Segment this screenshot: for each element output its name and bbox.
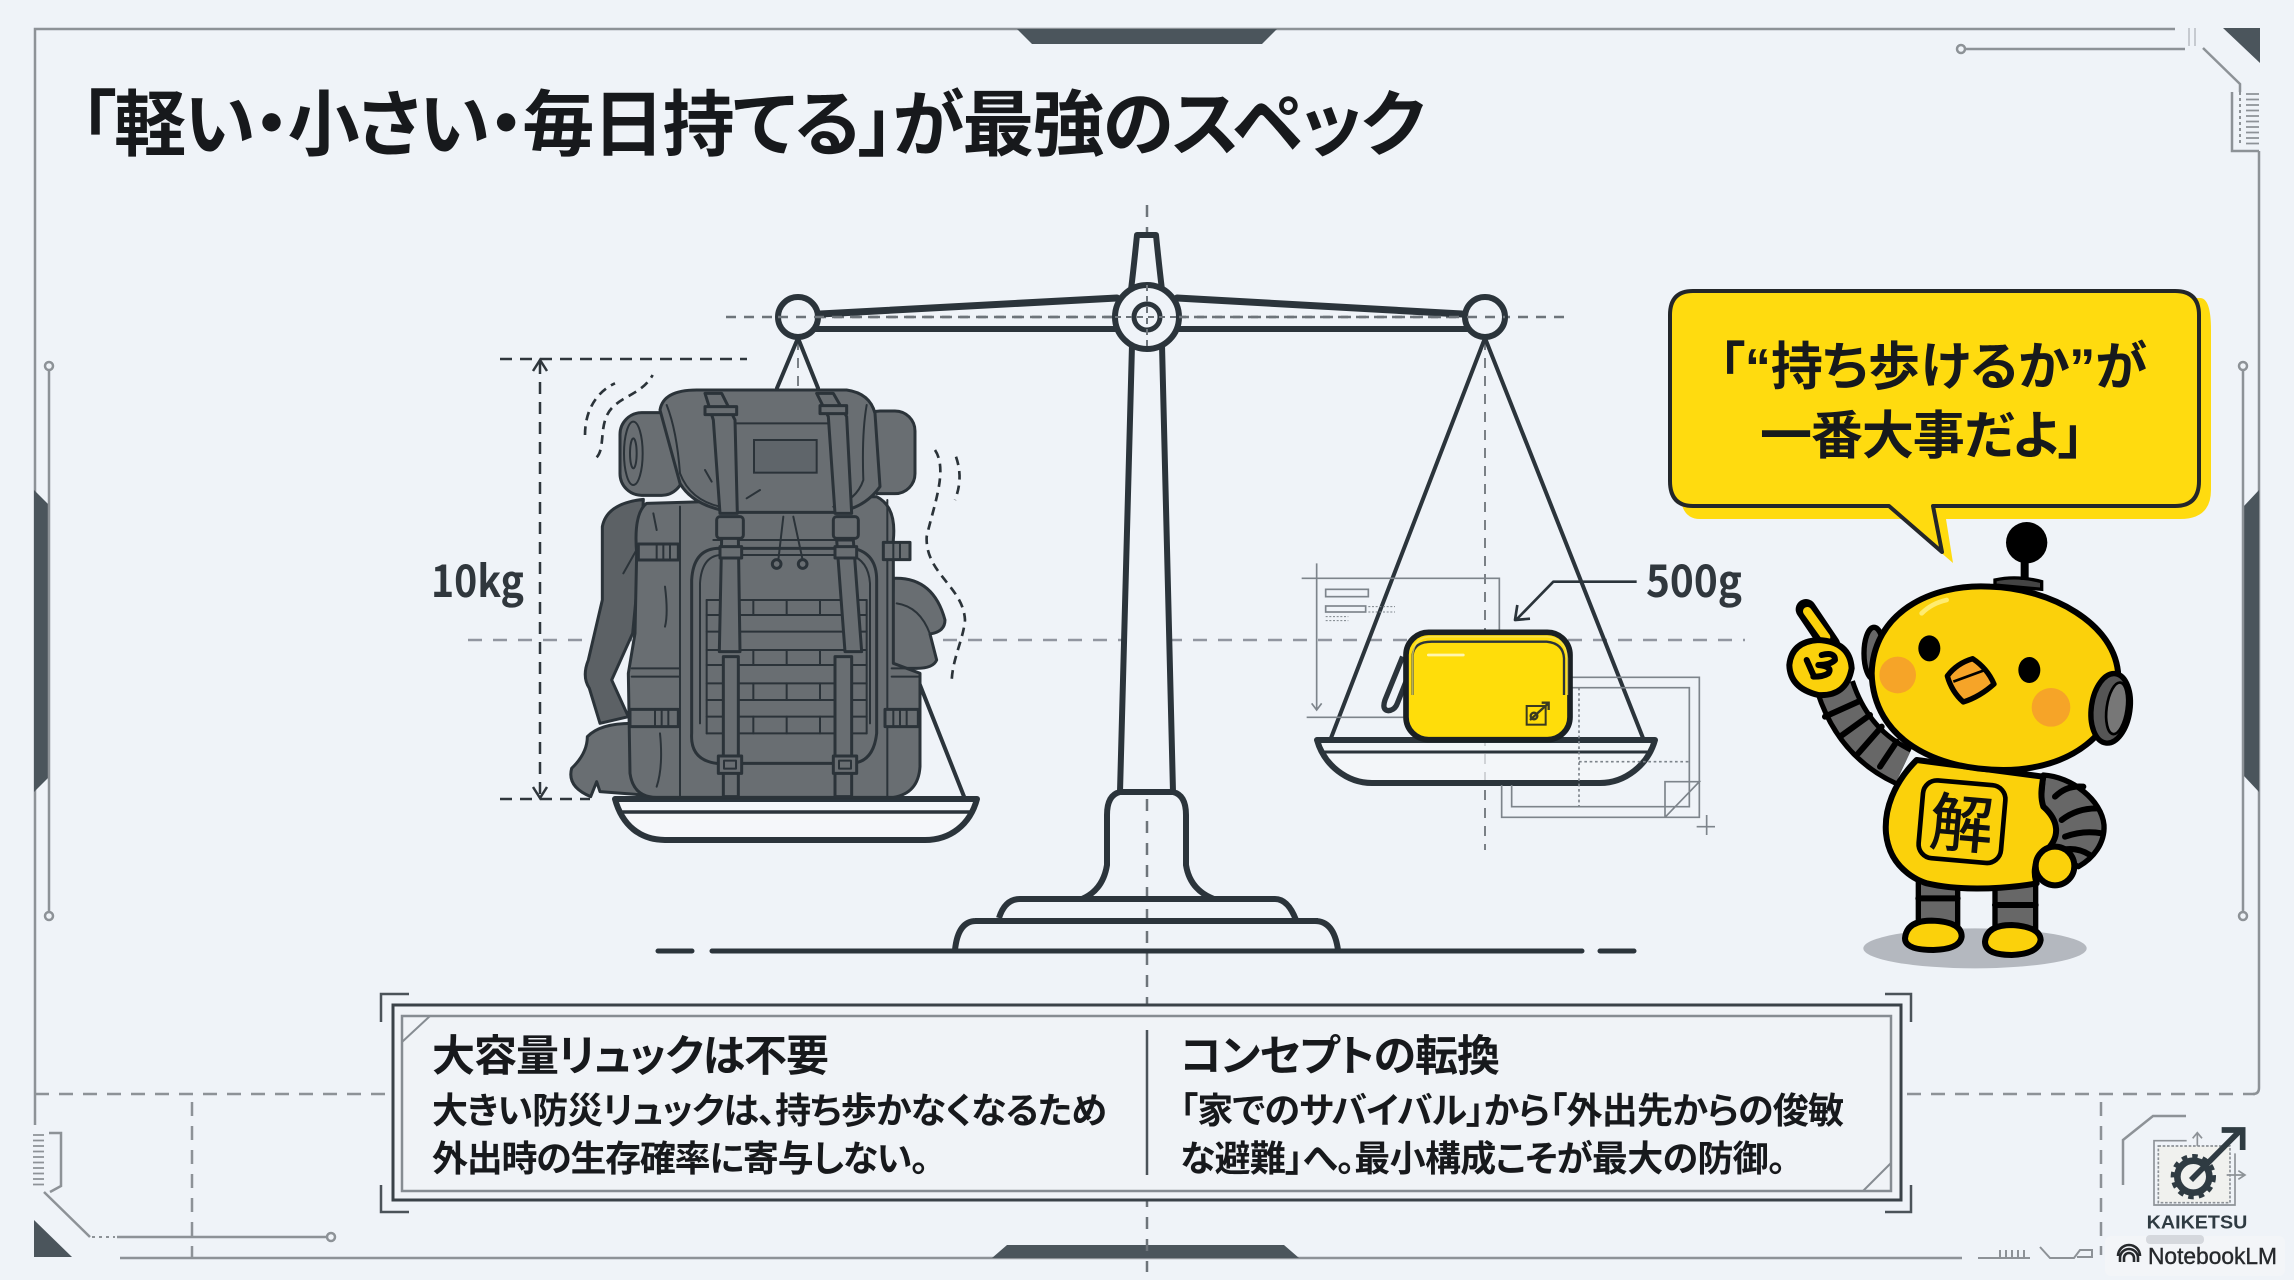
hip belt [571,723,643,797]
pouch zip pull [1384,657,1406,711]
left column text [432,1033,1107,1179]
watermark smudge [2146,1235,2204,1244]
motion lines around backpack [585,375,965,683]
scale strings left [777,338,965,799]
mascot chest badge: 解 [1926,772,1997,868]
panel outer frame [393,1005,1901,1200]
right column text: な避難」へ。最小構成こそが最大の防御。 [1180,1138,1786,1179]
KAIKETSU logo [2147,1130,2247,1233]
body seams [632,500,918,797]
panel divider [1146,1030,1148,1175]
title: 「軽い・小さい・毎日持てる」が最強のスペック [80,86,1425,166]
logo gear [2173,1157,2213,1197]
speech bubble: 一番大事だよ」 [1760,408,2084,466]
watermark icon [2118,1245,2140,1262]
balance scale [615,235,1655,951]
corner brackets [381,994,1911,1212]
scale beam [820,298,1462,314]
panel inner frame [402,1016,1891,1191]
guide dashes over beam [778,316,1505,318]
mascot left hand [2036,847,2074,885]
pivot right [1465,297,1505,337]
scale column [1120,345,1173,792]
mascot pointing hand [1789,609,1852,695]
logo wordmark: KAIKETSU [2147,1212,2247,1233]
webbing rows [707,600,867,733]
top lid [660,390,880,512]
scale finial [1131,235,1162,290]
mascot body [1886,760,2056,889]
logo arrow [2191,1130,2243,1180]
pivot left [778,297,818,337]
mascot cheeks [1879,657,2070,727]
left column text: 大きい防災リュックは、持ち歩かなくなるため [432,1090,1107,1131]
icon: backpack [571,390,945,797]
front pocket [692,548,877,763]
bottom info panel [381,994,1911,1212]
dimension lines for 10kg [500,359,747,799]
mascot raised arm [1825,687,1903,767]
straps [705,393,862,797]
icon: yellow pouch [1384,632,1570,740]
speech bubble [1670,291,2211,563]
mascot antenna [1995,522,2047,589]
arrow to pouch [1515,582,1637,620]
pouch logo [1527,703,1549,725]
mascot beak [1947,659,1994,702]
side pouch [892,578,945,668]
NotebookLM watermark [2105,1235,2285,1276]
buckles [717,517,858,773]
label: 10kg: 10kg [431,546,524,610]
blueprint sketches behind wallet [1302,563,1715,835]
mascot left ear [1864,627,1884,679]
watermark text: NotebookLM [2148,1243,2277,1269]
right column text [1180,1033,1844,1179]
left pan [615,799,977,840]
center and horizontal guide lines [468,205,1745,1272]
lid label [754,440,817,473]
right column text: コンセプトの転換 [1180,1033,1500,1081]
mascot headphone [2087,671,2135,746]
mascot head [1872,586,2118,770]
pivot center [1115,285,1179,349]
mascot robot chick [1789,522,2135,968]
bubble outline [1670,291,2199,552]
sleeping roll right [860,411,915,494]
right column text: 「家でのサバイバル」から「外出先からの俊敏 [1180,1090,1844,1131]
left column text: 外出時の生存確率に寄与しない。 [432,1138,929,1179]
bubble yellow backing [1680,298,2211,563]
logo blueprint square [2154,1133,2245,1205]
left column text: 大容量リュックは不要 [432,1033,829,1081]
right pan [1317,740,1655,783]
pouch body [1406,632,1570,740]
mascot eyes [1918,635,2040,683]
main body [628,497,920,797]
mascot legs [1918,877,2036,933]
sleeping roll left [620,413,683,495]
corner folds [402,1016,1891,1191]
ground line [658,948,1634,954]
mascot right arm [2040,775,2104,867]
scale strings right [1331,338,1643,738]
bubble text: 「“持ち歩けるか”が [1719,339,2147,397]
scale beam lower line [813,326,1470,332]
label: 500g: 500g [1646,546,1742,610]
mascot feet [1905,921,2041,955]
scale base [955,792,1338,950]
side straps [623,542,918,727]
mascot shadow [1863,928,2087,968]
drawcords [772,517,807,568]
watermark backdrop [2105,1236,2285,1276]
shoulder strap [585,499,643,723]
